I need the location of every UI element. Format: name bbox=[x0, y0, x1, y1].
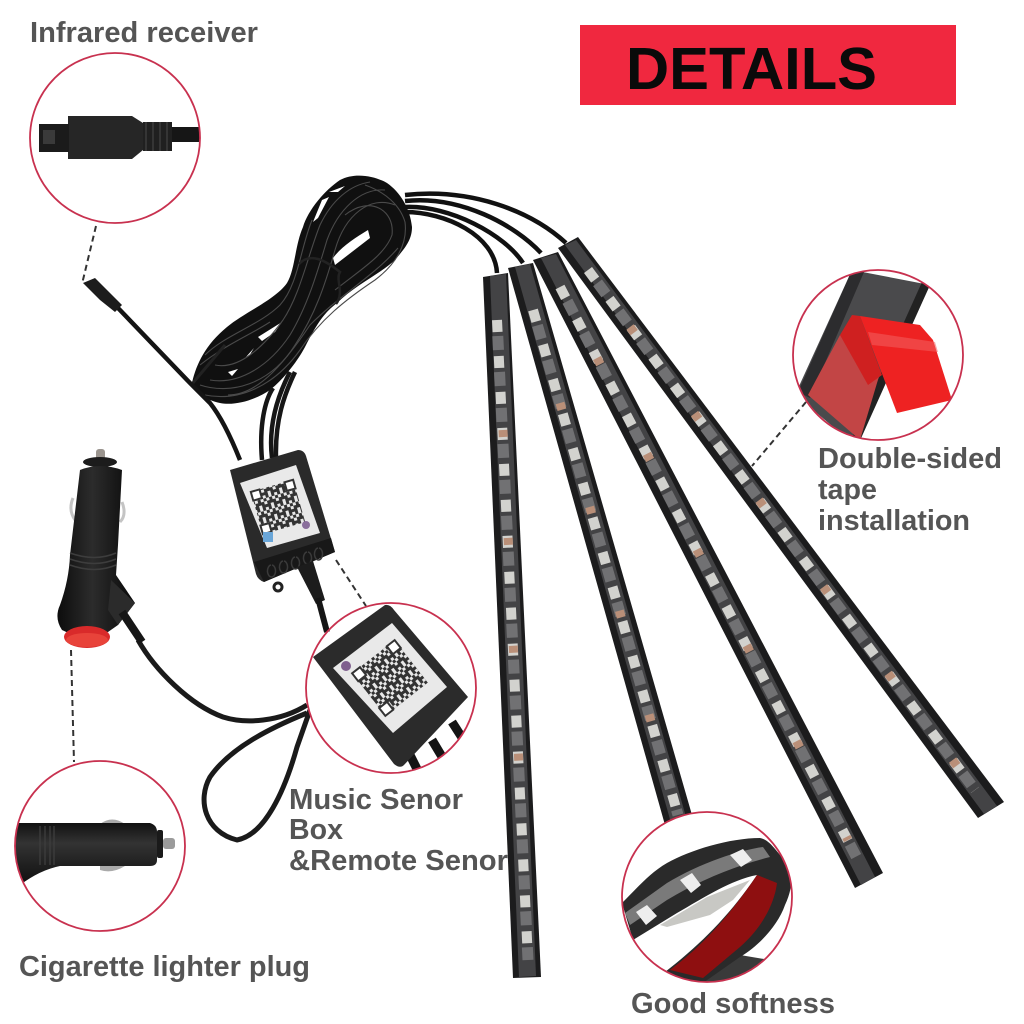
LED strip 4 bbox=[558, 237, 1004, 818]
title banner bbox=[580, 25, 956, 105]
title banner: DETAILS bbox=[626, 36, 877, 102]
LED strip 3 bbox=[533, 252, 883, 888]
DC connector cable bbox=[297, 561, 325, 604]
label: infrared receiver: Infrared receiver bbox=[30, 17, 258, 49]
label: double-sided tape installation: tape bbox=[818, 474, 877, 506]
label: music sensor box and remote sensor: Box bbox=[289, 814, 343, 846]
controller box bbox=[230, 450, 335, 591]
cigarette plug cable and loop bbox=[138, 640, 310, 840]
callout: music sensor box bbox=[306, 598, 476, 785]
label: good softness: Good softness bbox=[631, 988, 835, 1020]
strip lead wires bbox=[405, 194, 566, 273]
label: music sensor box and remote sensor: &Remote Senor bbox=[289, 845, 508, 877]
coiled cable bundle bbox=[192, 176, 412, 404]
callout: good softness bbox=[622, 812, 792, 990]
label: double-sided tape installation: Double-sided bbox=[818, 443, 1002, 475]
infrared receiver wire and plug bbox=[83, 278, 240, 460]
LED strip 1 bbox=[483, 273, 541, 978]
callout: cigarette lighter plug bbox=[10, 761, 185, 931]
wires into controller bbox=[261, 372, 295, 460]
callout: infrared receiver bbox=[30, 53, 204, 223]
LED strip 2 bbox=[508, 263, 692, 825]
label: music sensor box and remote sensor bbox=[289, 784, 508, 877]
dashed leader lines bbox=[71, 226, 806, 762]
label: music sensor box and remote sensor: Music Senor bbox=[289, 784, 463, 816]
callout: double-sided tape bbox=[793, 270, 963, 445]
label: double-sided tape installation bbox=[818, 443, 1002, 537]
cigarette lighter plug bbox=[57, 449, 142, 648]
label: double-sided tape installation: installation bbox=[818, 505, 970, 537]
label: cigarette lighter plug: Cigarette lighter plug bbox=[19, 951, 310, 983]
